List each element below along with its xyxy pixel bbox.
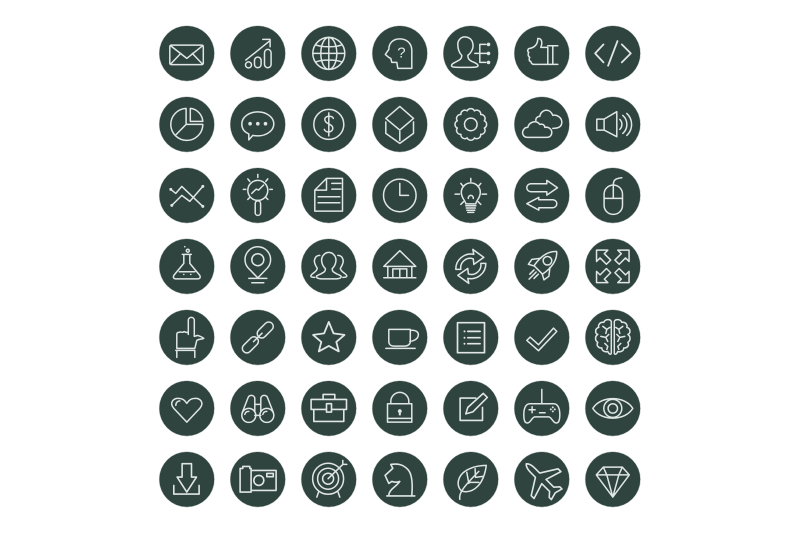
icon: line chart <box>159 168 214 223</box>
icon: thumbs up <box>514 26 570 81</box>
icon: gear <box>443 97 498 152</box>
icon: flask <box>159 239 214 294</box>
icon: toolbox <box>301 381 356 436</box>
icon: checklist <box>443 310 498 365</box>
icon: exchange arrows <box>514 168 570 223</box>
icon: house <box>372 239 428 294</box>
icon: growth chart <box>230 26 286 81</box>
icon: head with question: ? <box>397 44 406 61</box>
icon: brain <box>585 310 640 365</box>
icon: head with question <box>372 26 428 81</box>
icon: pie chart <box>159 97 214 152</box>
icon: target with arrow <box>301 452 356 507</box>
icon: document <box>301 168 356 223</box>
icon: light bulb <box>443 168 498 223</box>
icon: globe <box>301 26 356 81</box>
icon: download <box>159 452 214 507</box>
icon: dollar coin <box>301 97 356 152</box>
icon: map pin <box>230 239 286 294</box>
icon: chess knight <box>372 452 428 507</box>
icon: rocket <box>514 239 570 294</box>
icon: camera <box>230 452 286 507</box>
icon: expand arrows <box>585 239 640 294</box>
icon: airplane <box>513 450 570 508</box>
icon: person network <box>443 26 498 81</box>
icon: magnifier with chart <box>230 168 286 223</box>
icon: eye <box>585 381 640 436</box>
icon: check mark <box>514 310 570 365</box>
icon: clock <box>372 168 428 223</box>
icon: computer mouse <box>585 168 640 223</box>
icon: pointing hand <box>159 310 214 365</box>
icon: clouds <box>514 97 570 152</box>
icon: envelope <box>159 26 214 81</box>
icon: heart <box>159 381 214 436</box>
icon: edit pencil <box>443 381 498 436</box>
icon: leaf <box>443 452 498 507</box>
icon: speaker <box>585 97 640 152</box>
icon: star <box>301 310 356 365</box>
icon: code brackets <box>585 26 640 81</box>
icon: game controller <box>514 381 570 436</box>
icon: open box <box>372 97 428 152</box>
icon: binoculars <box>230 381 286 436</box>
icon: padlock <box>372 381 428 436</box>
icon: chain link <box>230 310 286 365</box>
icon: people group <box>301 239 356 294</box>
icon: speech bubble <box>230 97 286 152</box>
icon: refresh arrows <box>443 239 498 294</box>
icon: coffee cup <box>372 310 428 365</box>
icon: diamond <box>585 452 640 507</box>
